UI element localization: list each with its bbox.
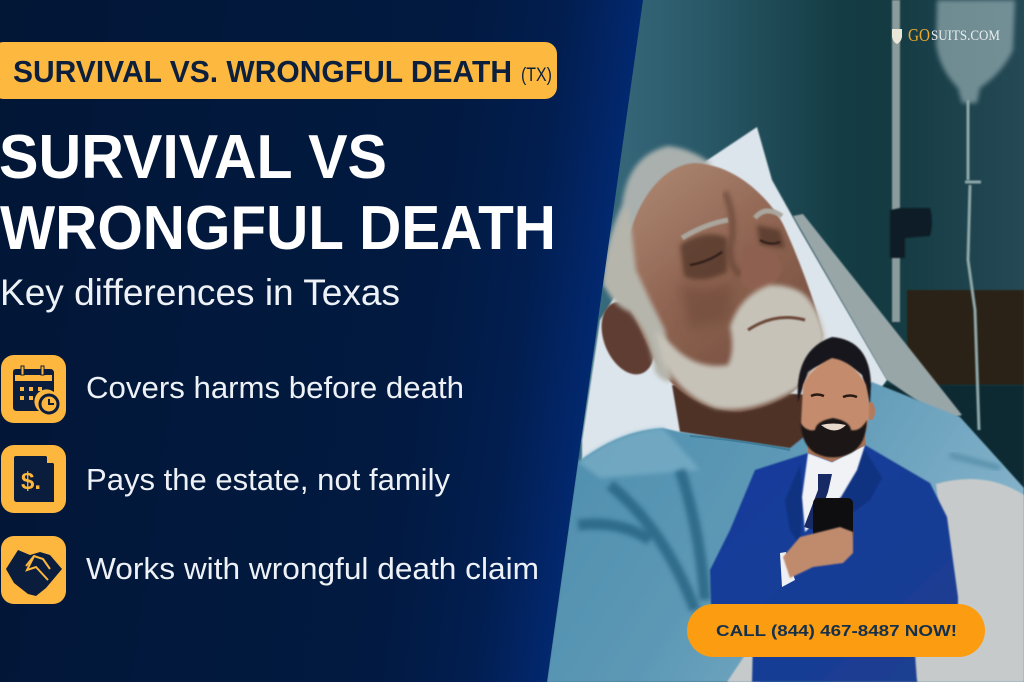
- hair: [798, 337, 871, 405]
- gosuits logo: [892, 25, 1000, 45]
- IV clamp: [890, 208, 932, 258]
- shirt: [802, 445, 865, 532]
- nose: [741, 245, 782, 290]
- item: pays the estate: [1, 445, 450, 513]
- gown collar: [690, 436, 790, 450]
- IV pole: [892, 0, 900, 322]
- IV tube: [965, 100, 981, 430]
- subtitle: Key differences in Texas: [0, 272, 400, 313]
- item: covers harms: [1, 355, 464, 423]
- main title: WRONGFUL DEATH: [0, 194, 556, 263]
- cheek shadow: [678, 280, 735, 330]
- face: [801, 358, 869, 458]
- item: covers harms: Covers harms before death: [86, 370, 464, 405]
- item: works with wrongful death claim: [1, 536, 539, 604]
- eye lid lines: [690, 240, 780, 265]
- patient neck: [672, 385, 820, 455]
- item: works with wrongful death claim: Works with wrongful death claim: [86, 551, 539, 586]
- gosuits logo: SUITS.COM: [931, 28, 1000, 44]
- top banner: (TX): [521, 65, 552, 86]
- dark lower wall: [880, 385, 1024, 505]
- brown wall band: [907, 290, 1024, 385]
- white sheet: [900, 479, 1024, 682]
- lapel shadow: [785, 450, 882, 545]
- beard: [655, 285, 825, 410]
- shirt cuff: [780, 552, 795, 587]
- icon: handshake: [1, 536, 66, 604]
- patient hair: [603, 146, 712, 300]
- logo shield: [892, 29, 902, 44]
- neck: [808, 430, 866, 462]
- right shoulder fold: [950, 455, 1000, 468]
- gosuits logo: GO: [908, 25, 930, 45]
- top banner: SURVIVAL VS. WRONGFUL DEATH: [13, 54, 512, 89]
- smile: [821, 424, 846, 430]
- eyebrows: [682, 211, 782, 238]
- icon: calendar with clock: [1, 355, 66, 423]
- patient gown: [547, 382, 1024, 682]
- phone: [813, 498, 853, 540]
- patient side hair: [605, 205, 672, 381]
- ear: [867, 402, 875, 420]
- dark navy left panel: [0, 0, 643, 682]
- hand: [783, 527, 853, 578]
- hospital photo background: [540, 0, 1024, 682]
- main title: [0, 123, 556, 263]
- beard: [800, 418, 867, 458]
- icon: dollar document: [1, 445, 66, 513]
- icon: dollar document: $.: [21, 468, 41, 495]
- main title: SURVIVAL VS: [0, 123, 387, 192]
- gown folds: [578, 470, 705, 610]
- pillow: [582, 127, 887, 470]
- eye shadows: [680, 225, 785, 280]
- attorney portrait: [710, 337, 958, 682]
- top banner: [0, 42, 557, 99]
- forehead wrinkle: [725, 192, 740, 275]
- lower sheet corner: [727, 655, 760, 682]
- tie: [804, 474, 832, 530]
- mouth: [748, 318, 805, 330]
- item: pays the estate: Pays the estate, not family: [86, 462, 450, 497]
- call to action button: [687, 604, 985, 657]
- eyes: [811, 394, 857, 397]
- suit jacket: [710, 445, 958, 682]
- patient head: [622, 163, 823, 412]
- bed rail: [793, 214, 962, 420]
- gown shoulder highlight: [578, 428, 700, 478]
- patient ear: [592, 294, 664, 382]
- call to action button: CALL (844) 467-8487 NOW!: [716, 623, 957, 640]
- IV bag: [936, 0, 1015, 103]
